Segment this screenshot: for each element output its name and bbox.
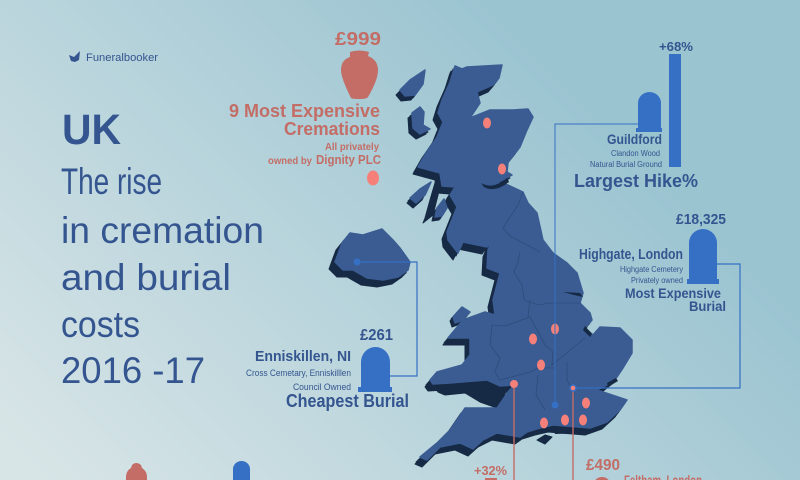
icon: pin key (367, 170, 379, 186)
title: and burial (61, 257, 231, 298)
title (61, 106, 264, 391)
icon: urn (cropped) (126, 463, 147, 480)
price: £261 (360, 327, 393, 344)
panel: most expensive cremations: Dignity PLC (316, 152, 382, 167)
icon: urn (341, 50, 378, 99)
map markers (354, 258, 576, 408)
panel: most expensive burial: Highgate Cemetery (620, 265, 683, 274)
logo: Funeralbooker (69, 51, 158, 64)
panel: cheapest burial: Cross Cemetary, Enniskilllen (246, 368, 351, 378)
panel: most expensive burial: Burial (689, 298, 726, 314)
panel: largest hike: Clandon Wood (611, 149, 660, 158)
panel: most expensive cremations: owned by (268, 156, 312, 167)
icon: headstone (636, 92, 662, 132)
location text: Highgate, London (579, 246, 683, 263)
logo wordmark: Funeralbooker (86, 52, 158, 64)
title: in cremation (61, 210, 264, 251)
icon: headstone (358, 347, 392, 392)
price: £999 (335, 29, 381, 49)
heading: 9 Most Expensive (229, 101, 380, 121)
panel: cheapest burial (246, 327, 409, 411)
panel: cheapest burial: Council Owned (293, 382, 351, 392)
price: £18,325 (676, 211, 726, 228)
panel: largest cremation hike (cropped) (474, 463, 507, 480)
map: United Kingdom (329, 65, 632, 467)
connector lines (357, 124, 740, 480)
icon: urn top (485, 478, 497, 480)
location text: Enniskillen, NI (255, 348, 351, 365)
map: estuary notches (481, 178, 618, 434)
map: land (335, 65, 632, 460)
icon: bird (69, 51, 80, 62)
location text: Guildford (607, 131, 662, 147)
title: costs (61, 304, 140, 345)
note: All privately (325, 142, 379, 153)
bar (669, 54, 681, 167)
title: The rise (61, 161, 162, 202)
heading: Most Expensive (625, 285, 721, 301)
panel: largest hike: Natural Burial Ground (590, 160, 662, 169)
icon: urn top (594, 477, 610, 480)
panel: largest hike (574, 39, 698, 191)
map: cremation pins (483, 118, 590, 428)
panel: most expensive burial (579, 211, 726, 314)
panel: cheapest cremation (cropped) (586, 457, 702, 480)
heading: Cheapest Burial (286, 391, 409, 411)
panel: most expensive cremations: Cremations (284, 119, 380, 139)
heading: Largest Hike% (574, 171, 698, 191)
value: +32% (474, 463, 507, 478)
title: UK (62, 106, 121, 154)
map: region boundaries (490, 192, 585, 410)
price: £490 (586, 457, 620, 474)
icon: headstone (687, 229, 719, 284)
map: extruded shadow (329, 68, 630, 467)
title: 2016 -17 (61, 350, 205, 391)
panel: most expensive burial: Privately owned (631, 276, 683, 285)
icon: headstone (cropped) (233, 461, 250, 480)
bar value: +68% (659, 39, 693, 54)
panel: most expensive cremations (229, 29, 382, 186)
